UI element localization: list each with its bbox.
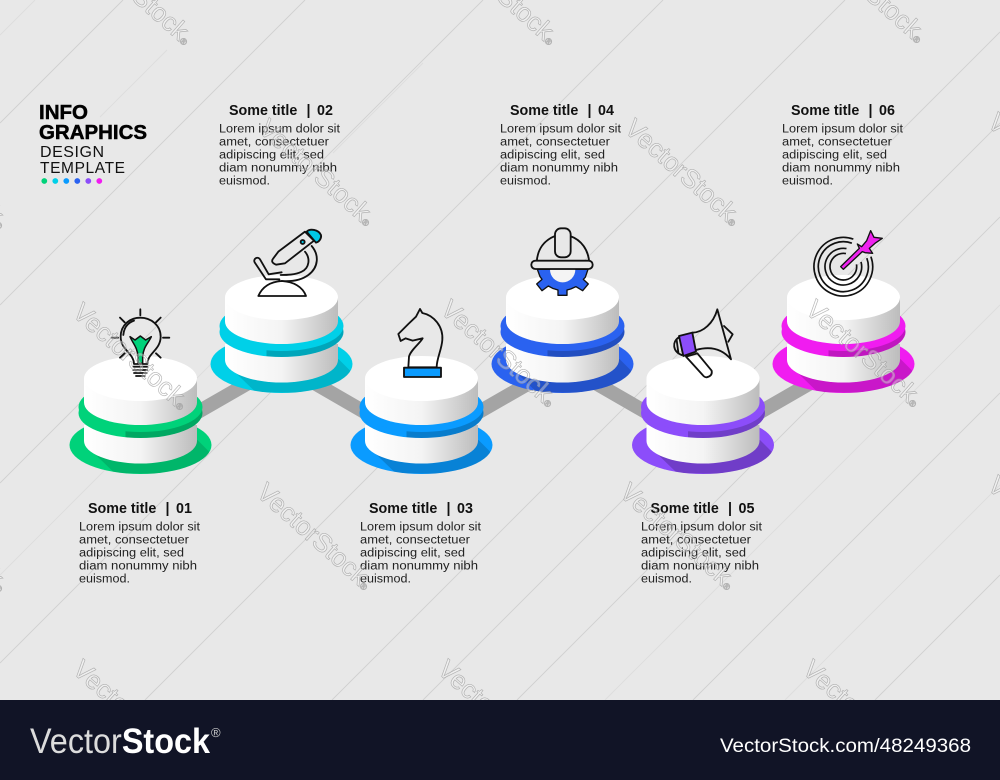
text block 06: adipiscing elit, sed [782,150,887,162]
text block 01: Lorem ipsum dolor sit [79,522,201,534]
text block 04: Some title [510,103,578,119]
text block 01: | [166,501,170,517]
icon: megaphone [674,309,733,377]
watermarks: VectorStock® [797,654,926,773]
cylinder 06 magenta [772,275,924,394]
text block 05: | [728,501,732,517]
text block 02: euismod. [219,176,270,188]
text block 03: amet, consectetuer [360,534,470,546]
watermarks: VectorStock® [614,477,743,596]
logo block: TEMPLATE [40,160,125,177]
text block 01 [79,501,201,586]
watermarks: VectorStock® [619,113,748,232]
watermarks: VectorStock® [800,294,929,413]
text block 02: Lorem ipsum dolor sit [219,124,341,136]
footer bar: VectorStock.com/48249368 [720,736,971,757]
text block 01: diam nonummy nibh [79,560,197,572]
text block 03: Lorem ipsum dolor sit [360,522,482,534]
text block 05 [641,501,763,586]
text block 03: diam nonummy nibh [360,560,478,572]
text block 01: Some title [88,501,156,517]
text block 03: euismod. [360,574,411,586]
text block 02: Some title [229,103,297,119]
icon: hard hat and gear [531,228,593,295]
cylinder 02 cyan [210,275,362,394]
text block 06: euismod. [782,176,833,188]
text block 06: Some title [791,103,859,119]
text block 04: adipiscing elit, sed [500,150,605,162]
text block 06: amet, consectetuer [782,136,892,148]
text block 03 [360,501,482,586]
logo block [39,102,147,184]
text block 01: euismod. [79,574,130,586]
logo block: DESIGN [40,144,104,161]
connector line [140,364,844,445]
icon: target and arrow [806,229,882,304]
text block 02 [219,103,341,188]
watermarks: VectorStock® [251,477,380,596]
footer bar: VectorStock [30,722,210,761]
text block 06: | [868,103,873,119]
text block 04: euismod. [500,176,551,188]
text block 04 [500,103,622,188]
text block 05: 05 [738,501,754,517]
text block 01: amet, consectetuer [79,534,189,546]
text block 03: 03 [457,501,473,517]
text block 06: Lorem ipsum dolor sit [782,124,904,136]
text block 02: 02 [317,103,333,119]
text block 04: diam nonummy nibh [500,162,618,174]
text block 02: diam nonummy nibh [219,162,337,174]
text block 02: amet, consectetuer [219,136,329,148]
cylinder 01 green [70,356,220,475]
text block 05: Lorem ipsum dolor sit [641,522,763,534]
icon: light bulb [112,309,169,376]
footer bar: ® [211,725,221,740]
icon: microscope [254,230,321,296]
text block 03: adipiscing elit, sed [360,548,465,560]
logo block: INFO [39,102,88,124]
text block 03: Some title [369,501,437,517]
text block 02: adipiscing elit, sed [219,150,324,162]
cylinder 05 purple [632,356,783,475]
text block 06: 06 [879,103,895,119]
footer bar [0,700,1000,780]
text block 03: | [446,501,451,517]
text block 05: diam nonummy nibh [641,560,759,572]
watermarks: VectorStock® [253,113,382,232]
text block 01: adipiscing elit, sed [79,548,184,560]
text block 01: 01 [176,501,192,517]
text block 04: | [588,103,592,119]
text block 05: euismod. [641,574,692,586]
text block 04: Lorem ipsum dolor sit [500,124,622,136]
watermarks: VectorStock® [67,297,196,416]
cylinder 03 blue [350,356,502,475]
text block 04: 04 [598,103,614,119]
logo block: GRAPHICS [39,122,147,144]
text block 04: amet, consectetuer [500,136,610,148]
text block 06 [782,103,904,188]
text block 06: diam nonummy nibh [782,162,900,174]
watermarks: VectorStock® [67,654,196,773]
icon: chess knight [398,309,442,377]
watermarks: VectorStock® [432,654,561,773]
text block 05: adipiscing elit, sed [641,548,746,560]
text block 05: amet, consectetuer [641,534,751,546]
watermarks: VectorStock® [435,294,564,413]
cylinder 04 royal blue [492,275,642,394]
text block 02: | [306,103,311,119]
text block 05: Some title [650,501,719,517]
